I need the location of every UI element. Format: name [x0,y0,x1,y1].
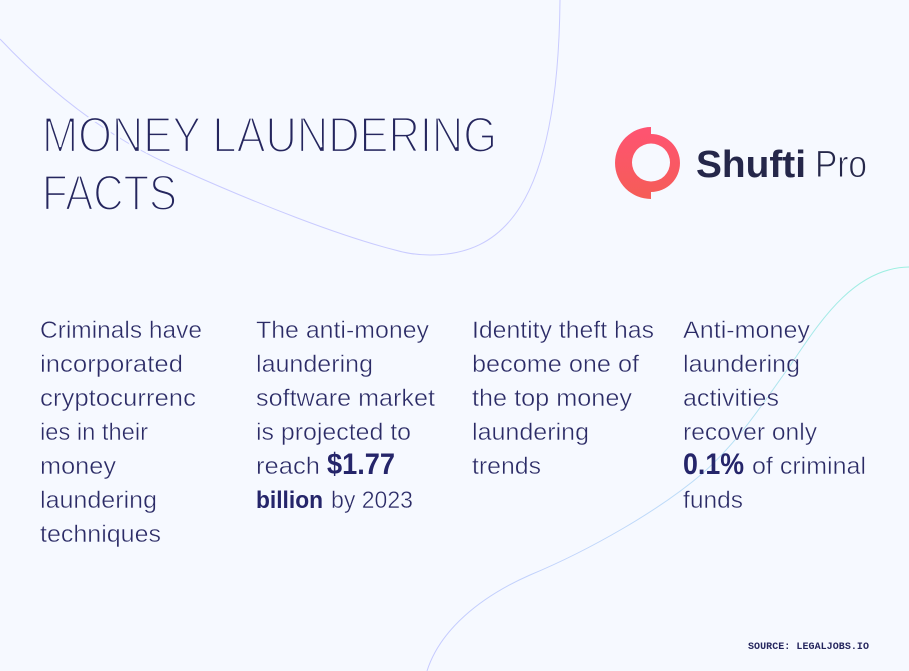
text block: fact 4: activities [683,385,779,412]
text block: fact 4: 0.1% [683,448,744,481]
text block: fact 4 [683,317,866,514]
source note: SOURCE: LEGALJOBS.IO [748,642,869,653]
text block: fact 4: funds [683,487,743,514]
text block: fact 2: billion [256,487,323,514]
text block: fact 1: laundering [40,487,157,514]
text block: fact 2: The anti-money [256,317,429,344]
text block: fact 1: incorporated [40,351,183,378]
text block: fact 1 [40,317,202,548]
logo wordmark: Shufti [696,144,806,186]
text block: fact 2: by 2023 [331,487,413,514]
text block: fact 2: $1.77 [327,448,395,481]
text block: fact 3: trends [472,453,541,480]
text block: fact 1: Criminals have [40,317,202,344]
text block: fact 2: is projected to [256,419,411,446]
text block: fact 2 [256,317,435,514]
text block: fact 2: laundering [256,351,373,378]
text block: fact 1: techniques [40,521,161,548]
text block: fact 3: the top money [472,385,632,412]
logo: Shufti Pro [615,127,806,199]
text block: fact 3 [472,317,654,480]
title: MONEY LAUNDERING [42,107,497,163]
text block: fact 4: of criminal [752,453,866,480]
text block: fact 4: recover only [683,419,817,446]
text block: fact 1: money [40,453,116,480]
text block: fact 4: laundering [683,351,800,378]
text block: fact 4: Anti-money [683,317,810,344]
icon: ring [615,127,680,199]
text block: fact 2: reach [256,453,320,480]
text block: fact 1: ies in their [40,419,148,446]
text block: fact 1: cryptocurrenc [40,385,196,412]
text block: fact 3: laundering [472,419,589,446]
text block: fact 2: software market [256,385,435,412]
logo wordmark: Pro: Pro [815,144,867,186]
title: FACTS [42,165,177,221]
text block: fact 3: Identity theft has [472,317,654,344]
text block: fact 3: become one of [472,351,639,378]
title [42,107,497,221]
